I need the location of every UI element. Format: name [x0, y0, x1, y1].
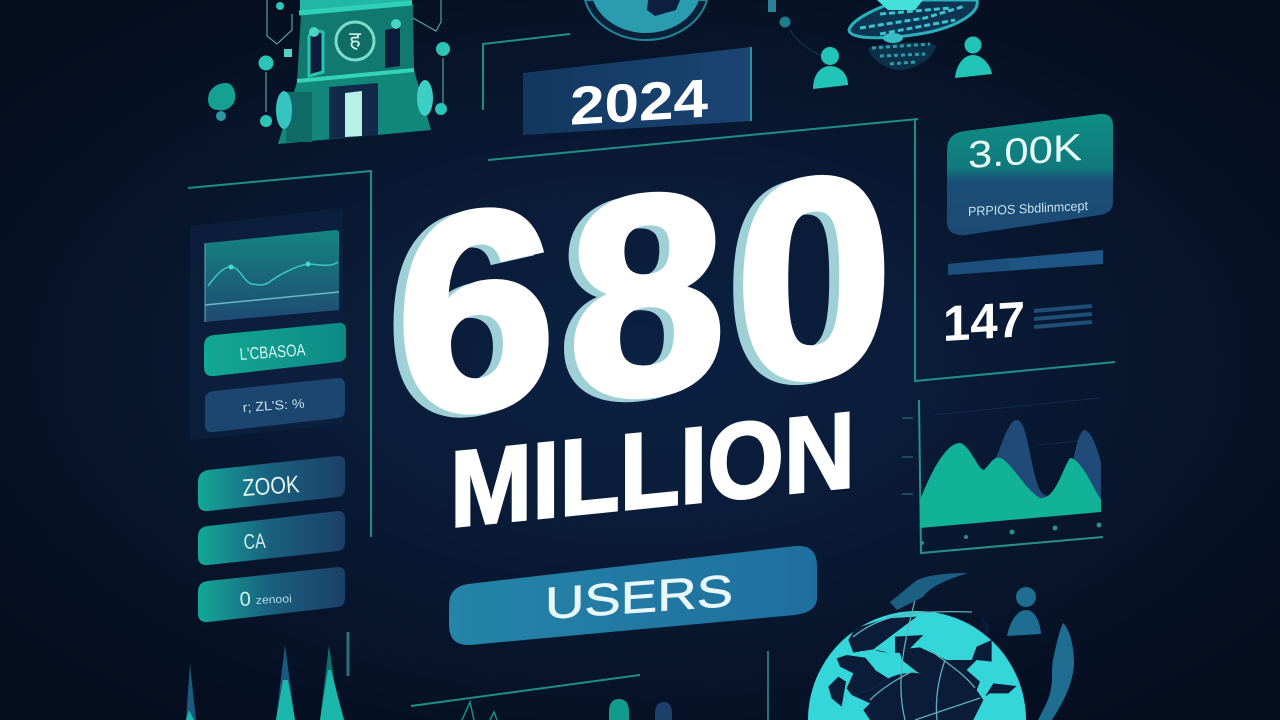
200K button: ZOOK [242, 471, 300, 502]
680 extrusion: 0 [725, 116, 883, 447]
zero button [198, 567, 345, 622]
panel background [190, 208, 343, 440]
front series [920, 443, 1101, 528]
icon: swoosh arrow right [1038, 623, 1074, 720]
line chart card [205, 230, 339, 322]
icon: world globe [808, 600, 1026, 720]
stat card 3.00K: 3.00K [968, 127, 1082, 177]
680 face: 0 [735, 113, 893, 444]
icon: user faded [1007, 587, 1041, 636]
stat 147 [943, 291, 1092, 352]
headline number 680 [386, 113, 893, 480]
icon: circuit connectors [266, 0, 443, 112]
icon: network globe [849, 0, 977, 70]
light landmass [860, 651, 917, 678]
progress bar [948, 250, 1103, 275]
CA button: CA [243, 530, 266, 554]
680 face: 8 [568, 130, 726, 461]
back series [995, 420, 1101, 505]
icon: top circle badge [585, 0, 707, 40]
680 extrusion: 8 [558, 133, 716, 464]
teal button: L'CBASOA [239, 340, 307, 364]
globe continents [828, 615, 1017, 720]
stat caption lines [1034, 306, 1092, 327]
stat card 3.00K [947, 114, 1113, 235]
200K button [198, 456, 345, 511]
bottom lollipop shapes [462, 699, 672, 720]
USERS text: USERS [545, 565, 733, 629]
USERS pill [449, 546, 817, 645]
icon: user right [955, 36, 992, 78]
frame lines [188, 34, 1115, 720]
icon: swoosh arrow top [890, 573, 968, 610]
stat card 3.00K: PRPIOS Sbdlinmcept [968, 198, 1088, 219]
icon: pin [208, 83, 235, 121]
blue button [205, 378, 345, 432]
680 extrusion: 6 [386, 149, 546, 480]
icon: circuit nodes [258, 2, 450, 127]
icon: user left [813, 47, 848, 89]
stat 147: 147 [943, 291, 1025, 352]
icon: building [276, 0, 433, 144]
680 face [396, 113, 893, 477]
CA button [198, 511, 345, 565]
zero button: zenooi [256, 593, 292, 607]
icon: small connector dots [768, 0, 822, 56]
globe meridians [853, 600, 980, 720]
zero button: 0 [239, 588, 251, 611]
year badge [523, 47, 751, 137]
blue button: r; ZL'S: % [242, 396, 306, 415]
area chart [902, 398, 1103, 553]
680 face: 6 [396, 146, 556, 477]
MILLION label: MILLION [450, 389, 855, 550]
teal button [204, 323, 346, 376]
icon: building: ह [349, 27, 361, 52]
year text: 2024 [570, 69, 708, 137]
spike chart [186, 645, 344, 720]
panel: left dashboard [190, 208, 346, 622]
680 extrusion [386, 116, 883, 480]
